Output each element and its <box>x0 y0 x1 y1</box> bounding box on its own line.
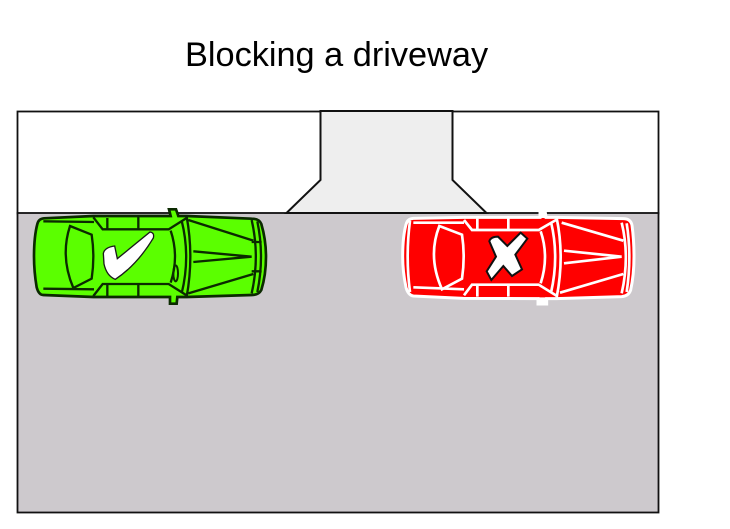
mirrors <box>538 212 547 304</box>
car detail lines <box>408 218 629 297</box>
car body <box>34 209 266 304</box>
car detail lines <box>43 217 262 297</box>
icon: check mark <box>103 232 154 279</box>
mirror detail <box>173 265 178 281</box>
car: red, blocking the driveway <box>403 212 634 304</box>
diagram frame: pavement area <box>18 112 658 214</box>
icon: cross mark <box>487 233 527 280</box>
title: Blocking a driveway <box>185 36 489 74</box>
driveway <box>286 111 486 213</box>
road <box>18 213 658 512</box>
car: green, correctly parked <box>34 209 266 304</box>
car body <box>403 213 634 304</box>
